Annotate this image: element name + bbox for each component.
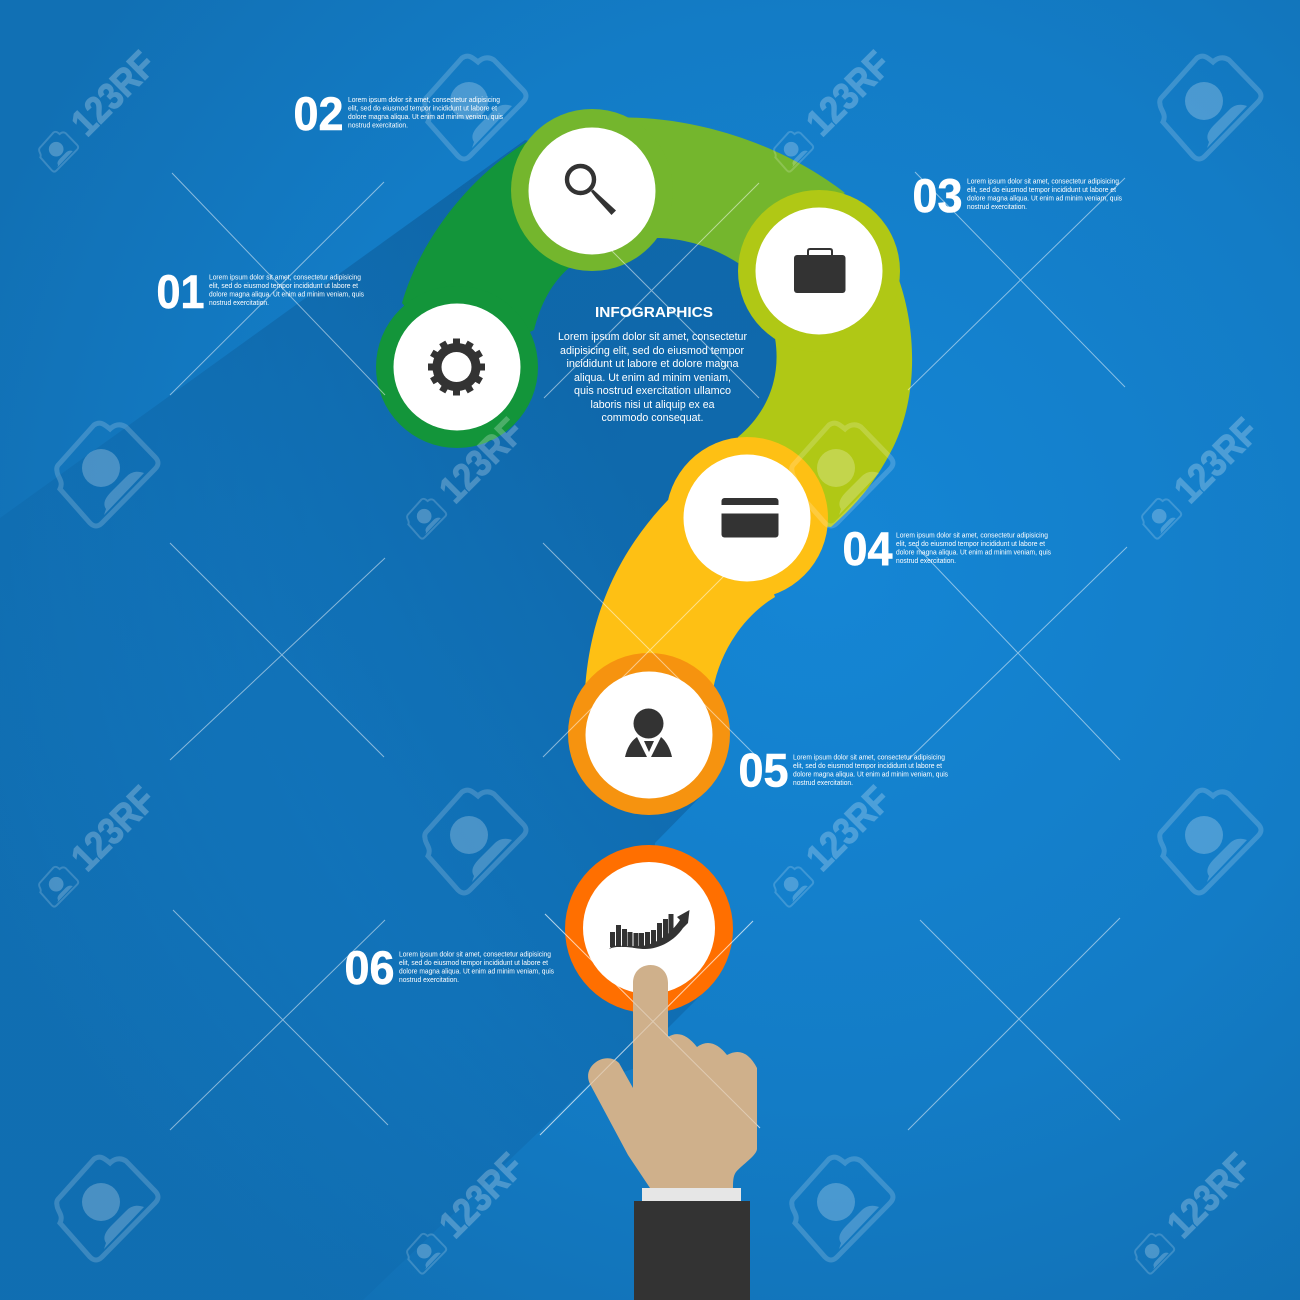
block 06 bbox=[344, 941, 554, 994]
block 05: 05 bbox=[738, 744, 788, 796]
block 01: elit, sed do eiusmod tempor incididunt ut labore et bbox=[209, 281, 358, 290]
source watermark: text marks: 123RF bbox=[64, 44, 164, 144]
ring 2 bbox=[511, 109, 673, 271]
block 01: dolore magna aliqua. Ut enim ad minim veniam, quis bbox=[209, 290, 364, 298]
icon: gear bbox=[428, 338, 485, 396]
source watermark: text marks: 123RF bbox=[64, 779, 164, 879]
ring 3 bbox=[738, 190, 900, 352]
block 02: Lorem ipsum dolor sit amet, consectetur adipisicing bbox=[348, 95, 500, 104]
center text bbox=[558, 305, 747, 424]
circle rings bbox=[376, 109, 900, 1013]
block 06: Lorem ipsum dolor sit amet, consectetur adipisicing bbox=[399, 950, 551, 958]
block 03: 03 bbox=[912, 169, 962, 222]
block 02: 02 bbox=[294, 87, 344, 140]
source watermark: text marks: 123RF bbox=[1167, 411, 1267, 511]
block 06: 06 bbox=[344, 941, 394, 994]
center body: aliqua. Ut enim ad minim veniam, bbox=[574, 372, 731, 384]
source watermark: text marks: 123RF bbox=[799, 44, 899, 144]
block 01: Lorem ipsum dolor sit amet, consectetur adipisicing bbox=[209, 272, 361, 282]
block 04: elit, sed do eiusmod tempor incididunt ut labore et bbox=[896, 539, 1045, 548]
block 04: nostrud exercitation. bbox=[896, 556, 956, 565]
center body: Lorem ipsum dolor sit amet, consectetur bbox=[558, 331, 747, 343]
block 03: Lorem ipsum dolor sit amet, consectetur adipisicing bbox=[967, 176, 1119, 186]
disc 6 bbox=[583, 862, 715, 994]
block 01: nostrud exercitation. bbox=[209, 298, 269, 307]
block 05: dolore magna aliqua. Ut enim ad minim veniam, quis bbox=[793, 770, 948, 778]
long shadow bbox=[0, 140, 850, 1300]
block 06: elit, sed do eiusmod tempor incididunt ut labore et bbox=[399, 958, 548, 967]
band: light green bbox=[591, 117, 845, 263]
sleeve bbox=[634, 1201, 750, 1300]
block 02: elit, sed do eiusmod tempor incididunt ut labore et bbox=[348, 104, 497, 112]
block 02: nostrud exercitation. bbox=[348, 120, 408, 130]
band: dark green bbox=[402, 140, 570, 367]
icon: briefcase bbox=[794, 249, 846, 293]
block 05: Lorem ipsum dolor sit amet, consectetur adipisicing bbox=[793, 752, 945, 762]
center heading: INFOGRAPHICS bbox=[595, 305, 713, 321]
disc 1 bbox=[394, 304, 520, 430]
block 03: nostrud exercitation. bbox=[967, 202, 1027, 211]
icon: magnifier bbox=[567, 166, 616, 215]
source watermark: text marks: 123RF bbox=[1160, 1146, 1260, 1246]
question mark bands bbox=[402, 117, 912, 690]
source watermark: text marks: 123RF bbox=[799, 779, 899, 879]
white discs bbox=[394, 128, 882, 994]
disc 3 bbox=[756, 208, 882, 334]
icon: credit card bbox=[722, 498, 778, 538]
block 06: nostrud exercitation. bbox=[399, 975, 459, 984]
ring 5 bbox=[568, 653, 730, 815]
crossed line over hand bbox=[540, 914, 760, 1135]
block 04: dolore magna aliqua. Ut enim ad minim veniam, quis bbox=[896, 548, 1051, 556]
band: yellow bbox=[585, 500, 775, 690]
block 02: dolore magna aliqua. Ut enim ad minim veniam, quis bbox=[348, 112, 503, 121]
block 01 bbox=[156, 265, 364, 318]
block 04: 04 bbox=[842, 522, 892, 575]
pointing hand bbox=[588, 965, 757, 1188]
block 06: dolore magna aliqua. Ut enim ad minim veniam, quis bbox=[399, 966, 554, 976]
block 05: elit, sed do eiusmod tempor incididunt ut labore et bbox=[793, 761, 942, 770]
block 03: dolore magna aliqua. Ut enim ad minim veniam, quis bbox=[967, 194, 1122, 202]
icon: businessman bbox=[625, 708, 672, 757]
disc 2 bbox=[528, 128, 656, 254]
center body: commodo consequat. bbox=[602, 412, 704, 424]
block 05 bbox=[738, 744, 948, 796]
block 05: nostrud exercitation. bbox=[793, 778, 853, 787]
block 02 bbox=[294, 87, 503, 140]
source watermark: text marks: 123RF bbox=[432, 411, 532, 511]
shirt cuff bbox=[642, 1188, 741, 1201]
disc 5 bbox=[586, 672, 712, 798]
block 03: elit, sed do eiusmod tempor incididunt ut labore et bbox=[967, 185, 1116, 194]
block 04 bbox=[842, 522, 1051, 575]
ring 6 bbox=[565, 845, 733, 1013]
disc 4 bbox=[684, 454, 810, 582]
ring 1 bbox=[376, 286, 538, 448]
ring 4 bbox=[666, 437, 828, 599]
band: yellow green bbox=[738, 271, 912, 527]
block 01: 01 bbox=[156, 265, 204, 318]
block 03 bbox=[912, 169, 1122, 222]
center body bbox=[558, 331, 747, 424]
center body: quis nostrud exercitation ullamco bbox=[574, 385, 731, 397]
icon: growth chart bbox=[609, 910, 690, 949]
source watermark: text marks: 123RF bbox=[432, 1146, 532, 1246]
center body: adipisicing elit, sed do eiusmod tempor bbox=[560, 345, 744, 357]
center body: incididunt ut labore et dolore magna bbox=[566, 358, 739, 370]
center body: laboris nisi ut aliquip ex ea bbox=[590, 399, 715, 411]
hand bbox=[588, 965, 757, 1300]
block 04: Lorem ipsum dolor sit amet, consectetur adipisicing bbox=[896, 530, 1048, 540]
thin crossed lines bbox=[170, 172, 1127, 1135]
